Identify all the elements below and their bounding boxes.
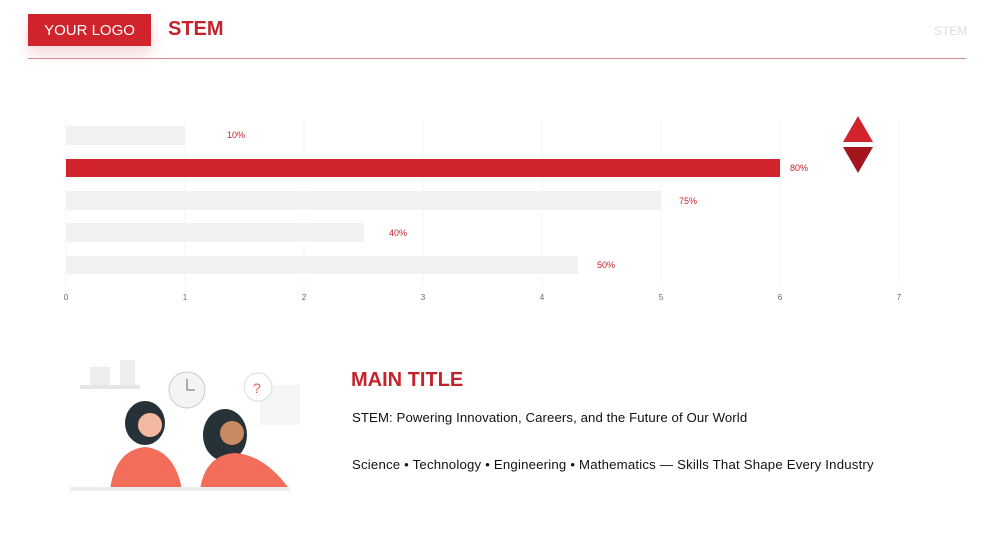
bar chart: 80% <box>790 163 808 173</box>
bar chart: 75% <box>679 196 697 206</box>
illustration: ? <box>253 380 261 396</box>
bar chart: 1 <box>183 293 188 302</box>
bar chart: 5 <box>659 293 664 302</box>
description: Science • Technology • Engineering • Mathematics — Skills That Shape Every Industry <box>352 457 874 472</box>
bar chart: 2 <box>302 293 307 302</box>
bar chart: 3 <box>421 293 426 302</box>
bar chart: 40% <box>389 228 407 238</box>
header title: STEM <box>168 18 224 40</box>
header tag: STEM <box>934 24 967 38</box>
bar chart: 50% <box>597 260 615 270</box>
bar chart: 10% <box>227 130 245 140</box>
subtitle: STEM: Powering Innovation, Careers, and the Future of Our World <box>352 410 747 425</box>
logo <box>28 14 151 46</box>
bar chart <box>64 116 902 302</box>
bar chart: 7 <box>897 293 902 302</box>
logo: YOUR LOGO <box>44 22 135 39</box>
main title: MAIN TITLE <box>351 369 463 391</box>
illustration <box>70 360 300 491</box>
bar chart: 4 <box>540 293 545 302</box>
bar chart: 6 <box>778 293 783 302</box>
bar chart: 0 <box>64 293 69 302</box>
